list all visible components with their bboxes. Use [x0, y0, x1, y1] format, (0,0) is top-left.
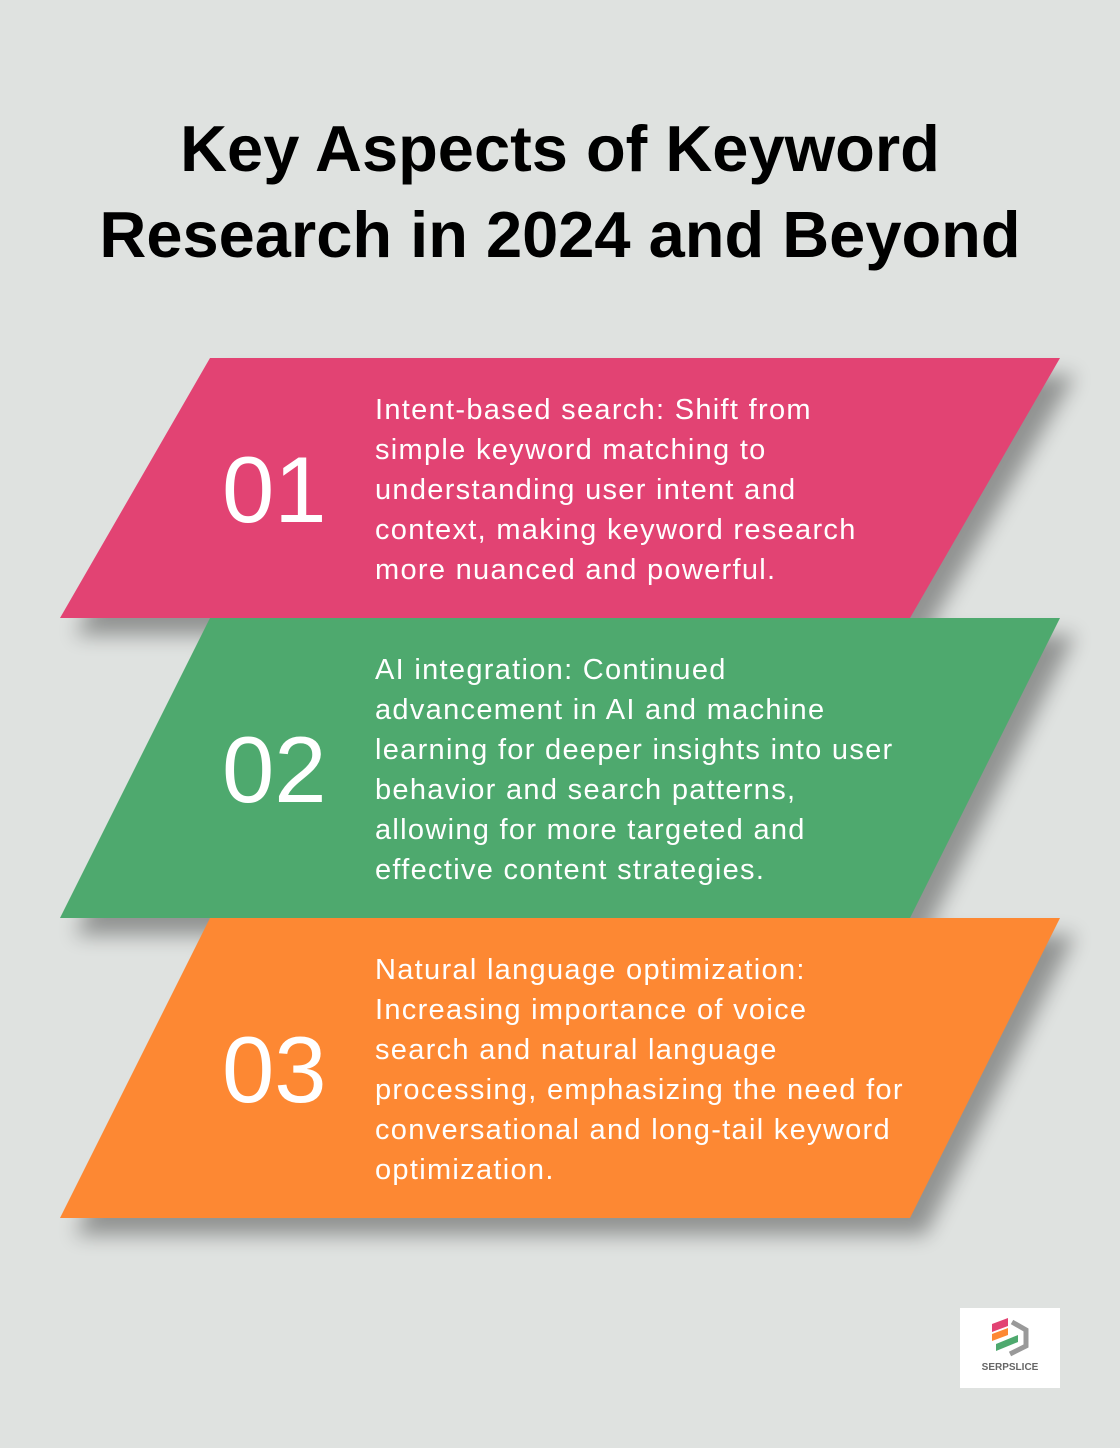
panel 1 shape	[60, 358, 1060, 618]
panel 2 text: effective content strategies.	[375, 854, 765, 886]
panel 3 shape	[60, 918, 1060, 1218]
panel 3 number: 03	[222, 1017, 327, 1122]
logo: SERPSLICE	[982, 1362, 1038, 1373]
panel 2 shape	[60, 618, 1060, 918]
panel 3 text: search and natural language	[375, 1034, 778, 1066]
panel 2 text: allowing for more targeted and	[375, 814, 806, 846]
panel 3 text	[375, 954, 904, 1186]
panel 2 number: 02	[222, 717, 327, 822]
panel 2 text: learning for deeper insights into user	[375, 734, 894, 766]
panel 3 text: processing, emphasizing the need for	[375, 1074, 904, 1106]
panel 2 text: behavior and search patterns,	[375, 774, 796, 806]
panel 1 text: simple keyword matching to	[375, 434, 767, 466]
panel 1 text: context, making keyword research	[375, 514, 857, 546]
title: Key Aspects of Keyword	[180, 112, 940, 185]
panel 3 text: conversational and long-tail keyword	[375, 1114, 891, 1146]
panel 2 text: AI integration: Continued	[375, 654, 727, 686]
panel 1 text: more nuanced and powerful.	[375, 554, 776, 586]
panel 1 text: understanding user intent and	[375, 474, 796, 506]
panel 3 text: Increasing importance of voice	[375, 994, 807, 1026]
panel 1 number: 01	[222, 437, 327, 542]
panel 3 text: optimization.	[375, 1154, 555, 1186]
panel 2 text: advancement in AI and machine	[375, 694, 825, 726]
panel 2 text	[375, 654, 894, 886]
panel 1 text: Intent-based search: Shift from	[375, 394, 812, 426]
panel 3 text: Natural language optimization:	[375, 954, 806, 986]
title	[99, 112, 1021, 271]
title: Research in 2024 and Beyond	[99, 198, 1021, 271]
logo	[960, 1308, 1060, 1388]
panel 1 text	[375, 394, 857, 586]
